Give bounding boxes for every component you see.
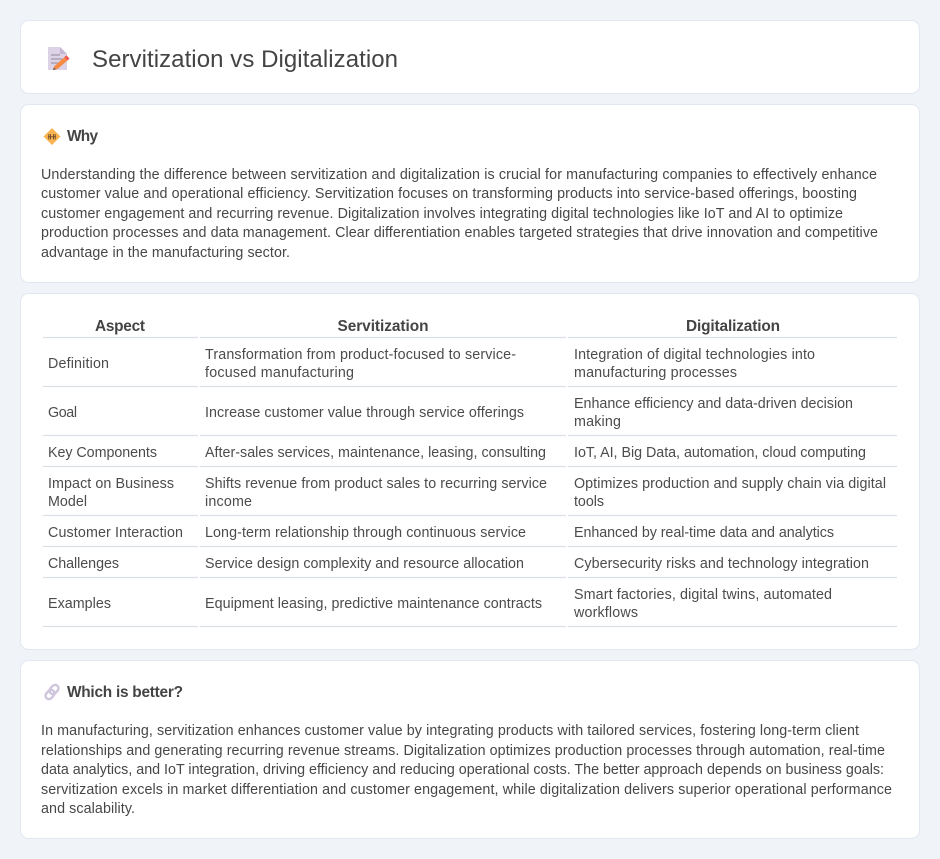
panel: comparison table: [20, 294, 920, 650]
text block: why paragraph: customer value and operational efficiency. Servitization focuses on transforming products into service-based offerings, boosting: [41, 186, 857, 202]
panel: which is better: [20, 660, 920, 838]
row: definition: Transformation from product-focused to service-: [205, 347, 516, 363]
text block: which is better paragraph: servitization excels in market differentiation and customer engagement, while digitalization delivers superior operational performance: [41, 782, 892, 798]
row: key components: Key Components: [48, 445, 157, 461]
row: definition: [48, 347, 815, 381]
text block: why paragraph: Understanding the difference between servitization and digitalization is crucial for manufacturing companies to effectively enhance: [41, 167, 877, 183]
text block: which is better paragraph: and scalability.: [41, 801, 135, 817]
row: challenges: Service design complexity and resource allocation: [205, 556, 524, 572]
text block: why paragraph: advantage in the manufacturing sector.: [41, 245, 290, 261]
table header: [95, 318, 780, 335]
row: key components: IoT, AI, Big Data, automation, cloud computing: [574, 445, 866, 461]
row: definition: Definition: [48, 356, 109, 372]
row: goal: [48, 396, 853, 430]
row: impact on business model: Impact on Business: [48, 476, 174, 492]
title: Servitization vs Digitalization: [92, 46, 398, 73]
icon: document with pencil: [48, 47, 70, 70]
text block: which is better paragraph: [41, 723, 892, 817]
row: definition: focused manufacturing: [205, 365, 354, 381]
row: definition: Integration of digital technologies into: [574, 347, 815, 363]
row: challenges: Cybersecurity risks and technology integration: [574, 556, 869, 572]
table header: Servitization: [338, 318, 428, 335]
row: customer interaction: Enhanced by real-time data and analytics: [574, 525, 834, 541]
icon: warning diamond: [44, 128, 60, 145]
row: examples: [48, 587, 832, 621]
row: key components: After-sales services, maintenance, leasing, consulting: [205, 445, 546, 461]
row: key components: [48, 445, 866, 461]
row: impact on business model: Optimizes production and supply chain via digital: [574, 476, 886, 492]
row: goal: Enhance efficiency and data-driven decision: [574, 396, 853, 412]
row: impact on business model: [48, 476, 886, 510]
text block: which is better paragraph: data analytics, and IoT integration, driving efficiency and reducing operational costs. The better approach depends on business goals:: [41, 762, 884, 778]
row: customer interaction: Customer Interaction: [48, 525, 183, 541]
row: goal: Increase customer value through service offerings: [205, 405, 524, 421]
row: examples: Equipment leasing, predictive maintenance contracts: [205, 596, 542, 612]
icon: chain link: [44, 683, 60, 701]
heading: which is better: Which is better?: [67, 684, 183, 701]
row: examples: workflows: [573, 605, 638, 621]
text block: why paragraph: [41, 167, 878, 261]
text block: why paragraph: customer engagement and recurring revenue. Digitalization involves integrating digital technologies like IoT and AI to optimize: [41, 206, 843, 222]
row: customer interaction: Long-term relationship through continuous service: [205, 525, 526, 541]
row: impact on business model: Model: [48, 494, 87, 510]
row: challenges: [48, 556, 869, 572]
table header: Aspect: [95, 318, 145, 335]
row: impact on business model: Shifts revenue from product sales to recurring service: [205, 476, 547, 492]
row: definition: manufacturing processes: [574, 365, 737, 381]
panel: header: [20, 20, 920, 94]
row: customer interaction: [48, 525, 834, 541]
row: impact on business model: income: [205, 494, 252, 510]
text block: which is better paragraph: relationships and generating recurring revenue streams. Digitalization optimizes production processes through automation, real-time: [41, 743, 885, 759]
row: impact on business model: tools: [574, 494, 604, 510]
panel: why: [20, 104, 920, 282]
row: examples: Examples: [48, 596, 111, 612]
text block: why paragraph: production processes and data management. Clear differentiation enables targeted strategies that drive innovation and competitive: [41, 225, 878, 241]
row: challenges: Challenges: [48, 556, 119, 572]
table header: Digitalization: [686, 318, 780, 335]
row: goal: Goal: [48, 405, 77, 421]
heading: why: Why: [67, 128, 98, 145]
text block: which is better paragraph: In manufacturing, servitization enhances customer value by integrating products with tailored services, fostering long-term client: [41, 723, 859, 739]
row: goal: making: [574, 414, 621, 430]
row: examples: Smart factories, digital twins, automated: [574, 587, 832, 603]
